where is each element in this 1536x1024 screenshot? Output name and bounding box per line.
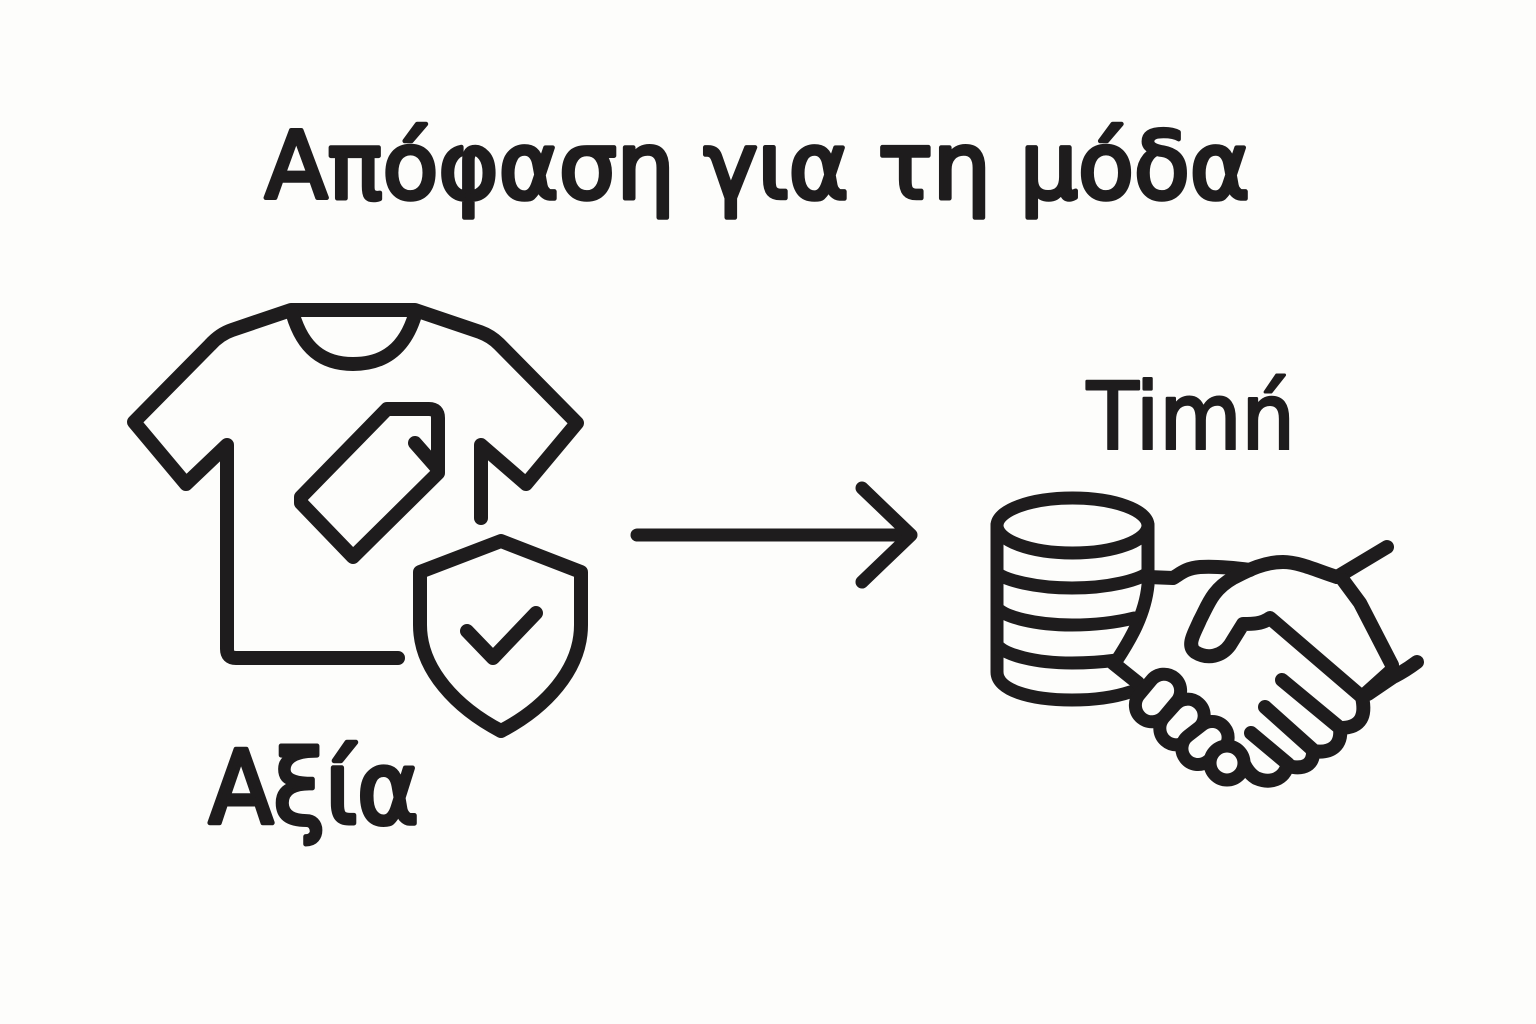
infographic canvas	[127, 122, 1424, 846]
label: price: Timή	[1086, 363, 1295, 471]
icon: t-shirt with price tag	[134, 310, 577, 658]
icon: stack of coins	[997, 498, 1148, 700]
title: Απόφαση για τη μόδα	[265, 112, 1250, 220]
icon: price tag	[301, 409, 438, 557]
icon: shield with check mark	[420, 541, 581, 731]
icon: handshake	[1113, 547, 1417, 781]
arrow	[637, 488, 911, 582]
fist fingers	[1129, 667, 1244, 780]
label: value: Αξία	[209, 729, 419, 847]
